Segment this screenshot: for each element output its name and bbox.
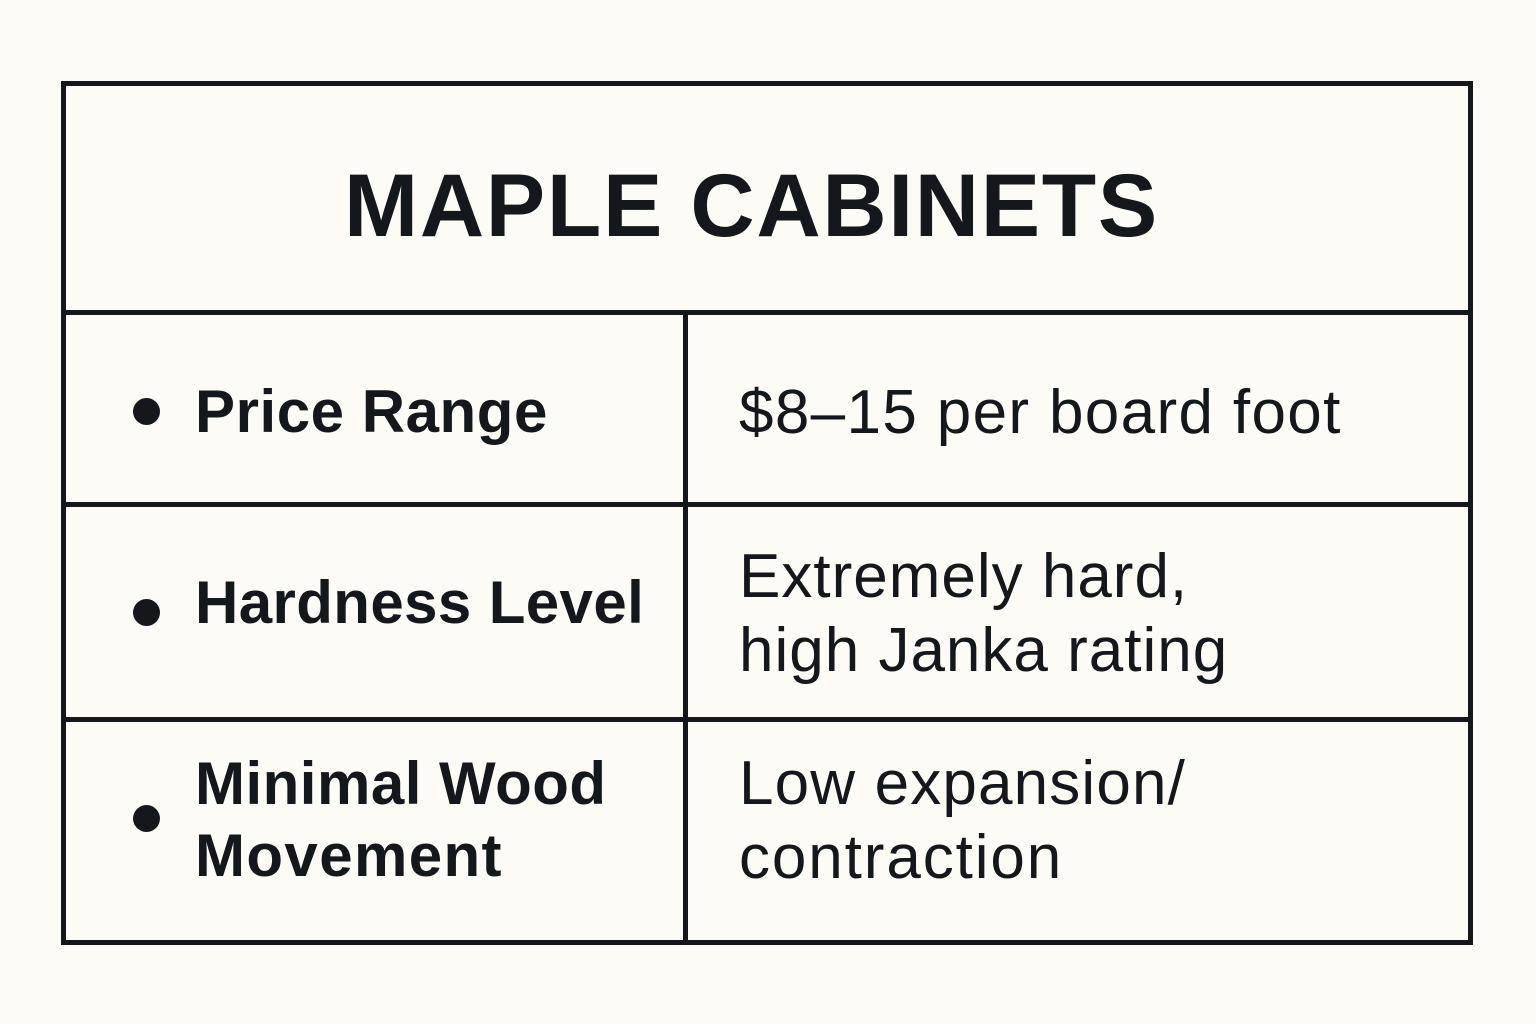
- value: hardness level: Extremely hard,: [739, 542, 1188, 611]
- value: hardness level: [739, 542, 1228, 685]
- bullet: minimal wood movement: [133, 805, 160, 832]
- bullet: price range: [133, 398, 160, 425]
- table panel: maple cabinets: [61, 81, 1473, 945]
- value: hardness level: high Janka rating: [739, 616, 1228, 685]
- value: minimal wood movement: contraction: [739, 823, 1063, 892]
- label: minimal wood movement: [195, 750, 607, 889]
- label: price range: Price Range: [195, 378, 548, 445]
- label: minimal wood movement: Minimal Wood: [195, 750, 607, 817]
- label: minimal wood movement: Movement: [195, 822, 503, 889]
- value: price range: $8–15 per board foot: [739, 378, 1342, 447]
- title: MAPLE CABINETS: [344, 155, 1159, 255]
- value: minimal wood movement: [739, 749, 1186, 892]
- value: minimal wood movement: Low expansion/: [739, 749, 1186, 818]
- bullet: hardness level: [133, 599, 160, 626]
- label: hardness level: Hardness Level: [195, 569, 644, 636]
